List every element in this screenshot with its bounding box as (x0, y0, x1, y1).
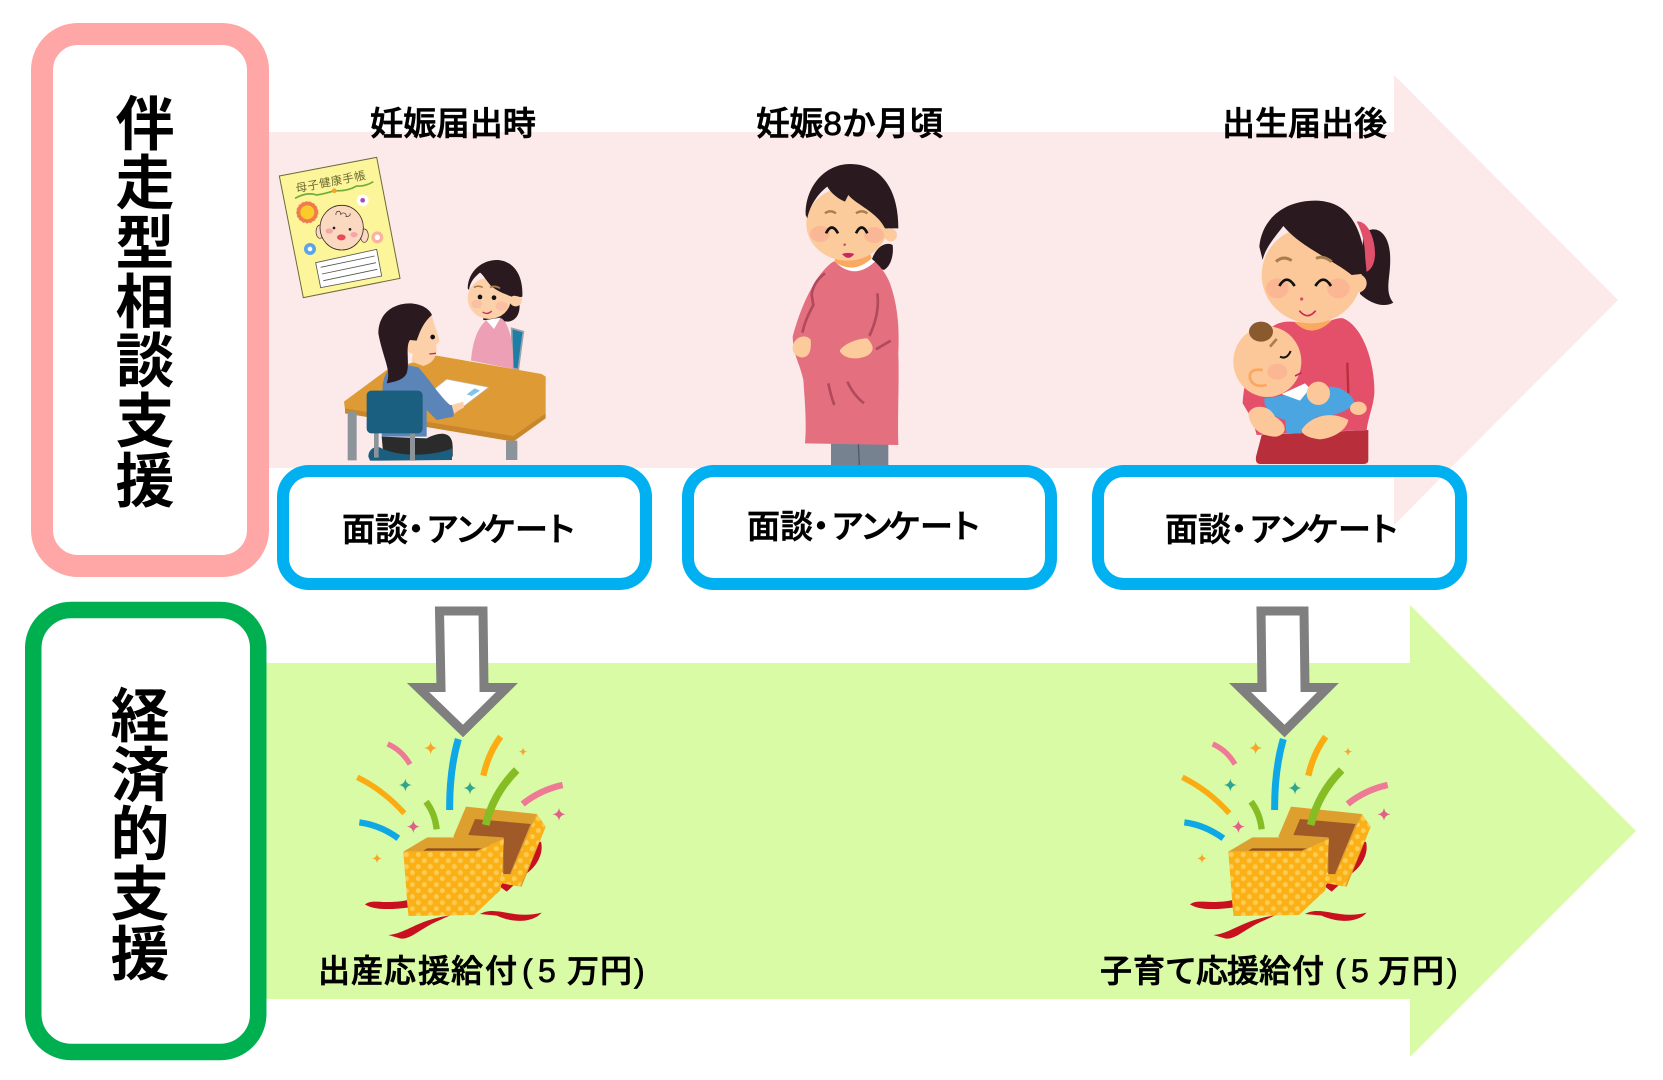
label: around 8 months of pregnancy: 妊娠8か月頃 (756, 105, 943, 142)
arrow: survey to childcare benefit (1240, 611, 1328, 731)
pink timeline arrow (269, 75, 1618, 525)
label: after birth notification: 出生届出後 (1222, 105, 1387, 142)
callout box: interview and survey 1 (283, 471, 646, 584)
label: birth support benefit 50,000 yen: 出産応援給付(5万円) (318, 953, 645, 989)
heading: economic support: 経済的支援 (110, 684, 170, 988)
illustration: consultation at a desk (344, 260, 546, 461)
callout box: interview and survey 2 (688, 471, 1051, 584)
callout box: interview and survey 2: 面談・アンケート (747, 508, 982, 545)
illustration: maternal and child health handbook: 母子健康手帳 (295, 168, 367, 195)
callout box: interview and survey 3 (1098, 471, 1461, 584)
label: childcare support benefit 50,000 yen: 子育て応援給付(5万円) (1100, 953, 1458, 989)
heading: accompanying consultation support: 伴走型相談支援 (116, 92, 175, 515)
illustration: pregnant woman (793, 164, 899, 465)
callout box: interview and survey 1: 面談・アンケート (342, 511, 577, 548)
illustration: maternal and child health handbook (279, 157, 400, 298)
green timeline arrow (266, 605, 1636, 1057)
callout box: interview and survey 3: 面談・アンケート (1165, 511, 1400, 548)
label: at pregnancy notification: 妊娠届出時 (370, 105, 536, 142)
icon: gift box with confetti, childcare benefit (1182, 737, 1391, 939)
illustration: mother holding a baby (1233, 201, 1393, 464)
panel: pink frame for accompanying consultation support (42, 34, 258, 566)
icon: gift box with confetti, birth benefit (357, 737, 566, 939)
panel: green frame for economic support (33, 610, 258, 1052)
arrow: survey to birth benefit (418, 611, 507, 731)
